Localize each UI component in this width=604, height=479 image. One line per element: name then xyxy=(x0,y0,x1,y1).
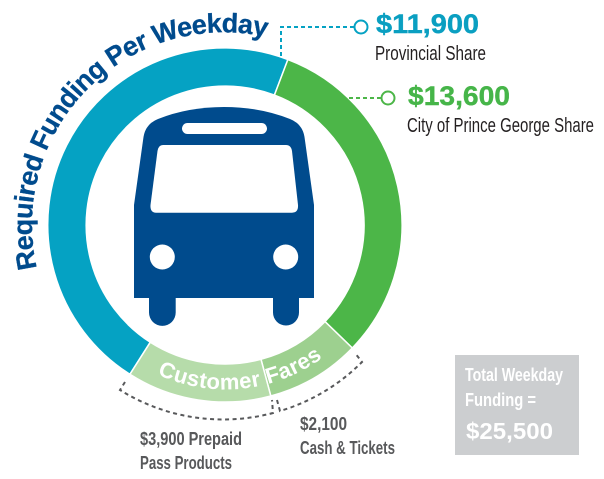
label: cash and tickets: Cash & Tickets xyxy=(300,437,395,458)
bracket: prepaid pass products xyxy=(120,382,273,419)
bus destination sign xyxy=(182,123,267,134)
segment: prepaid pass products xyxy=(130,342,271,402)
leader: provincial share xyxy=(281,20,368,56)
segment: city share xyxy=(274,60,402,348)
heading: required funding per weekday: Required Funding Per Weekday xyxy=(14,12,269,270)
bracket: cash and tickets xyxy=(277,353,362,411)
bus wheels xyxy=(149,290,299,326)
bus windshield xyxy=(150,145,298,213)
callout: total weekday funding xyxy=(455,355,579,455)
callout: total weekday funding: $25,500 xyxy=(466,418,553,444)
value: city amount: $13,600 xyxy=(408,81,510,111)
value: provincial amount: $11,900 xyxy=(376,9,479,39)
label: cash and tickets: $2,100 xyxy=(300,413,347,434)
bus right headlight xyxy=(273,244,298,270)
bus left headlight xyxy=(150,244,175,270)
funding ring chart xyxy=(48,48,402,402)
label: prepaid pass products xyxy=(140,428,242,473)
segment: provincial share xyxy=(48,48,288,374)
callout: total weekday funding: Total Weekday xyxy=(465,365,563,385)
icon: bus xyxy=(134,107,314,326)
leader: city share xyxy=(349,92,394,104)
segment: cash and tickets xyxy=(261,322,352,396)
label: provincial share: Provincial Share xyxy=(375,42,486,65)
curved label: customer fares: Customer Fares xyxy=(160,350,320,390)
label: cash and tickets xyxy=(300,413,395,458)
label: prepaid pass products: $3,900 Prepaid xyxy=(140,428,242,449)
bus body xyxy=(134,107,314,298)
label: prepaid pass products: Pass Products xyxy=(140,452,232,473)
callout: total weekday funding: Funding = xyxy=(465,390,536,410)
